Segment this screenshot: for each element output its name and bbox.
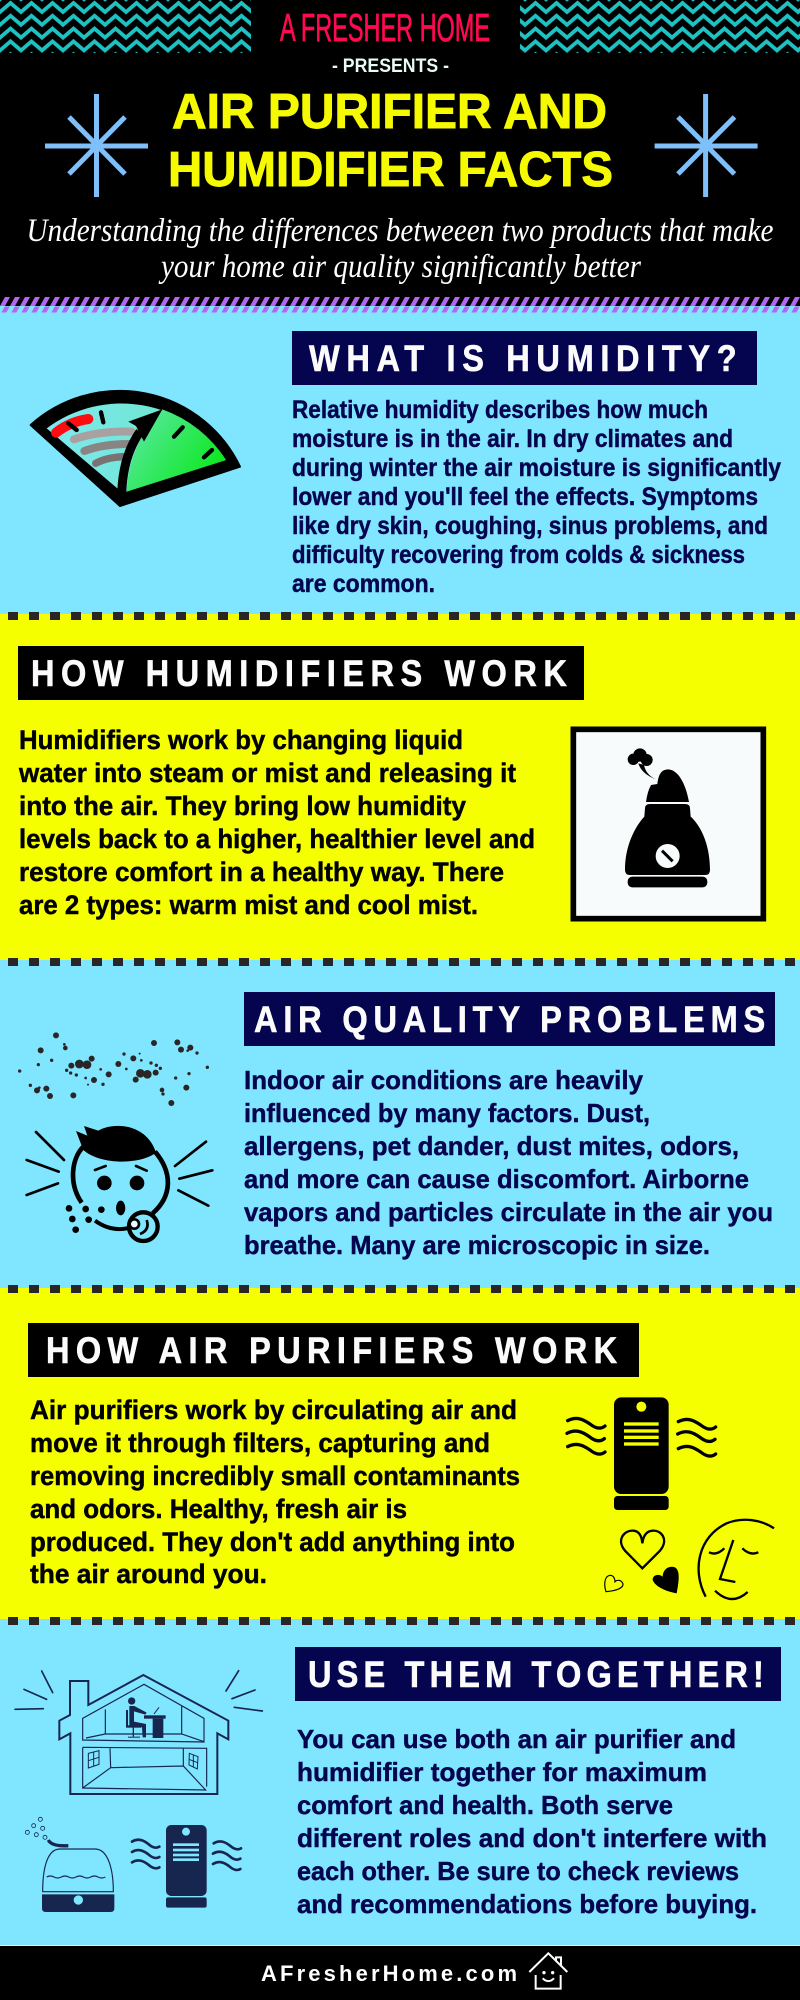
icon: right starburst xyxy=(655,94,758,197)
heading: USE THEM TOGETHER! xyxy=(308,1654,764,1695)
icon: smiling house xyxy=(529,1953,567,1989)
body text: vapors and particles circulate in the air you xyxy=(244,1197,773,1227)
heading: HOW HUMIDIFIERS WORK xyxy=(31,653,567,694)
icon: left starburst xyxy=(45,94,148,197)
body text xyxy=(244,1065,773,1260)
body text xyxy=(292,396,781,598)
body text: lower and you'll feel the effects. Symptoms xyxy=(292,483,758,511)
body text: water into steam or mist and releasing it xyxy=(18,758,516,788)
icon: hearts and happy face xyxy=(605,1520,774,1599)
body text: each other. Be sure to check reviews xyxy=(297,1856,739,1886)
heading: AIR QUALITY PROBLEMS xyxy=(254,999,765,1040)
body text: comfort and health. Both serve xyxy=(297,1790,673,1820)
body text: difficulty recovering from colds & sickness xyxy=(292,541,745,569)
subtitle: your home air quality significantly better xyxy=(158,249,641,285)
hatched divider xyxy=(0,297,800,312)
icon: humidity gauge xyxy=(31,391,240,506)
presents label: - PRESENTS - xyxy=(332,56,449,77)
body text: breathe. Many are microscopic in size. xyxy=(244,1230,710,1260)
body text: Air purifiers work by circulating air and xyxy=(30,1395,517,1425)
main title: HUMIDIFIER FACTS xyxy=(168,143,613,197)
body text xyxy=(18,725,535,920)
body text: allergens, pet dander, dust mites, odors, xyxy=(244,1131,739,1161)
body text: influenced by many factors. Dust, xyxy=(244,1098,650,1128)
zigzag pattern left xyxy=(0,0,251,53)
icon: coughing face xyxy=(27,1126,212,1241)
main title xyxy=(168,85,613,197)
body text xyxy=(30,1395,520,1589)
dashed divider 4 xyxy=(8,1617,800,1625)
body text: Relative humidity describes how much xyxy=(292,396,708,424)
main title: AIR PURIFIER AND xyxy=(172,85,607,139)
body text: restore comfort in a healthy way. There xyxy=(19,857,504,887)
panel: air quality problems xyxy=(18,992,775,1260)
footer band xyxy=(0,1945,800,2000)
dashed divider 1 xyxy=(8,612,800,620)
icon: house with person at desk xyxy=(15,1671,262,1794)
subtitle xyxy=(26,213,774,285)
brand name: A FRESHER HOME xyxy=(280,7,490,50)
body text: the air around you. xyxy=(30,1559,267,1589)
panel: how air purifiers work xyxy=(28,1323,774,1599)
body text: different roles and don't interfere with xyxy=(297,1823,767,1853)
body text: into the air. They bring low humidity xyxy=(19,791,466,821)
body text: moisture is in the air. In dry climates and xyxy=(292,425,733,453)
body text: You can use both an air purifier and xyxy=(297,1724,736,1754)
icon: airborne dust particles xyxy=(18,1032,209,1106)
body text: are 2 types: warm mist and cool mist. xyxy=(19,890,478,920)
body text: produced. They don't add anything into xyxy=(30,1527,515,1557)
body text: and odors. Healthy, fresh air is xyxy=(30,1494,407,1524)
body text: are common. xyxy=(292,570,435,598)
dashed divider 2 xyxy=(8,958,800,966)
heading: WHAT IS HUMIDITY? xyxy=(309,338,737,379)
icon: humidifier in frame xyxy=(573,729,763,919)
body text: levels back to a higher, healthier level and xyxy=(19,824,535,854)
panel: how humidifiers work xyxy=(18,646,763,920)
body text: removing incredibly small contaminants xyxy=(30,1461,520,1491)
panel: use them together xyxy=(15,1647,781,1919)
body text: Indoor air conditions are heavily xyxy=(244,1065,644,1095)
icon: air purifier navy xyxy=(132,1825,241,1908)
icon: air purifier xyxy=(567,1397,716,1510)
body text: humidifier together for maximum xyxy=(297,1757,707,1787)
body text: and recommendations before buying. xyxy=(297,1889,757,1919)
body text xyxy=(297,1724,767,1919)
header band xyxy=(0,0,800,312)
website address: AFresherHome.com xyxy=(261,1961,517,1986)
heading: HOW AIR PURIFIERS WORK xyxy=(46,1330,617,1371)
body text: Humidifiers work by changing liquid xyxy=(19,725,463,755)
body text: move it through filters, capturing and xyxy=(30,1428,490,1458)
body text: and more can cause discomfort. Airborne xyxy=(244,1164,749,1194)
dashed divider 3 xyxy=(8,1285,800,1293)
panel: what is humidity xyxy=(31,331,781,598)
zigzag pattern right xyxy=(520,0,800,53)
icon: humidifier xyxy=(25,1817,114,1912)
